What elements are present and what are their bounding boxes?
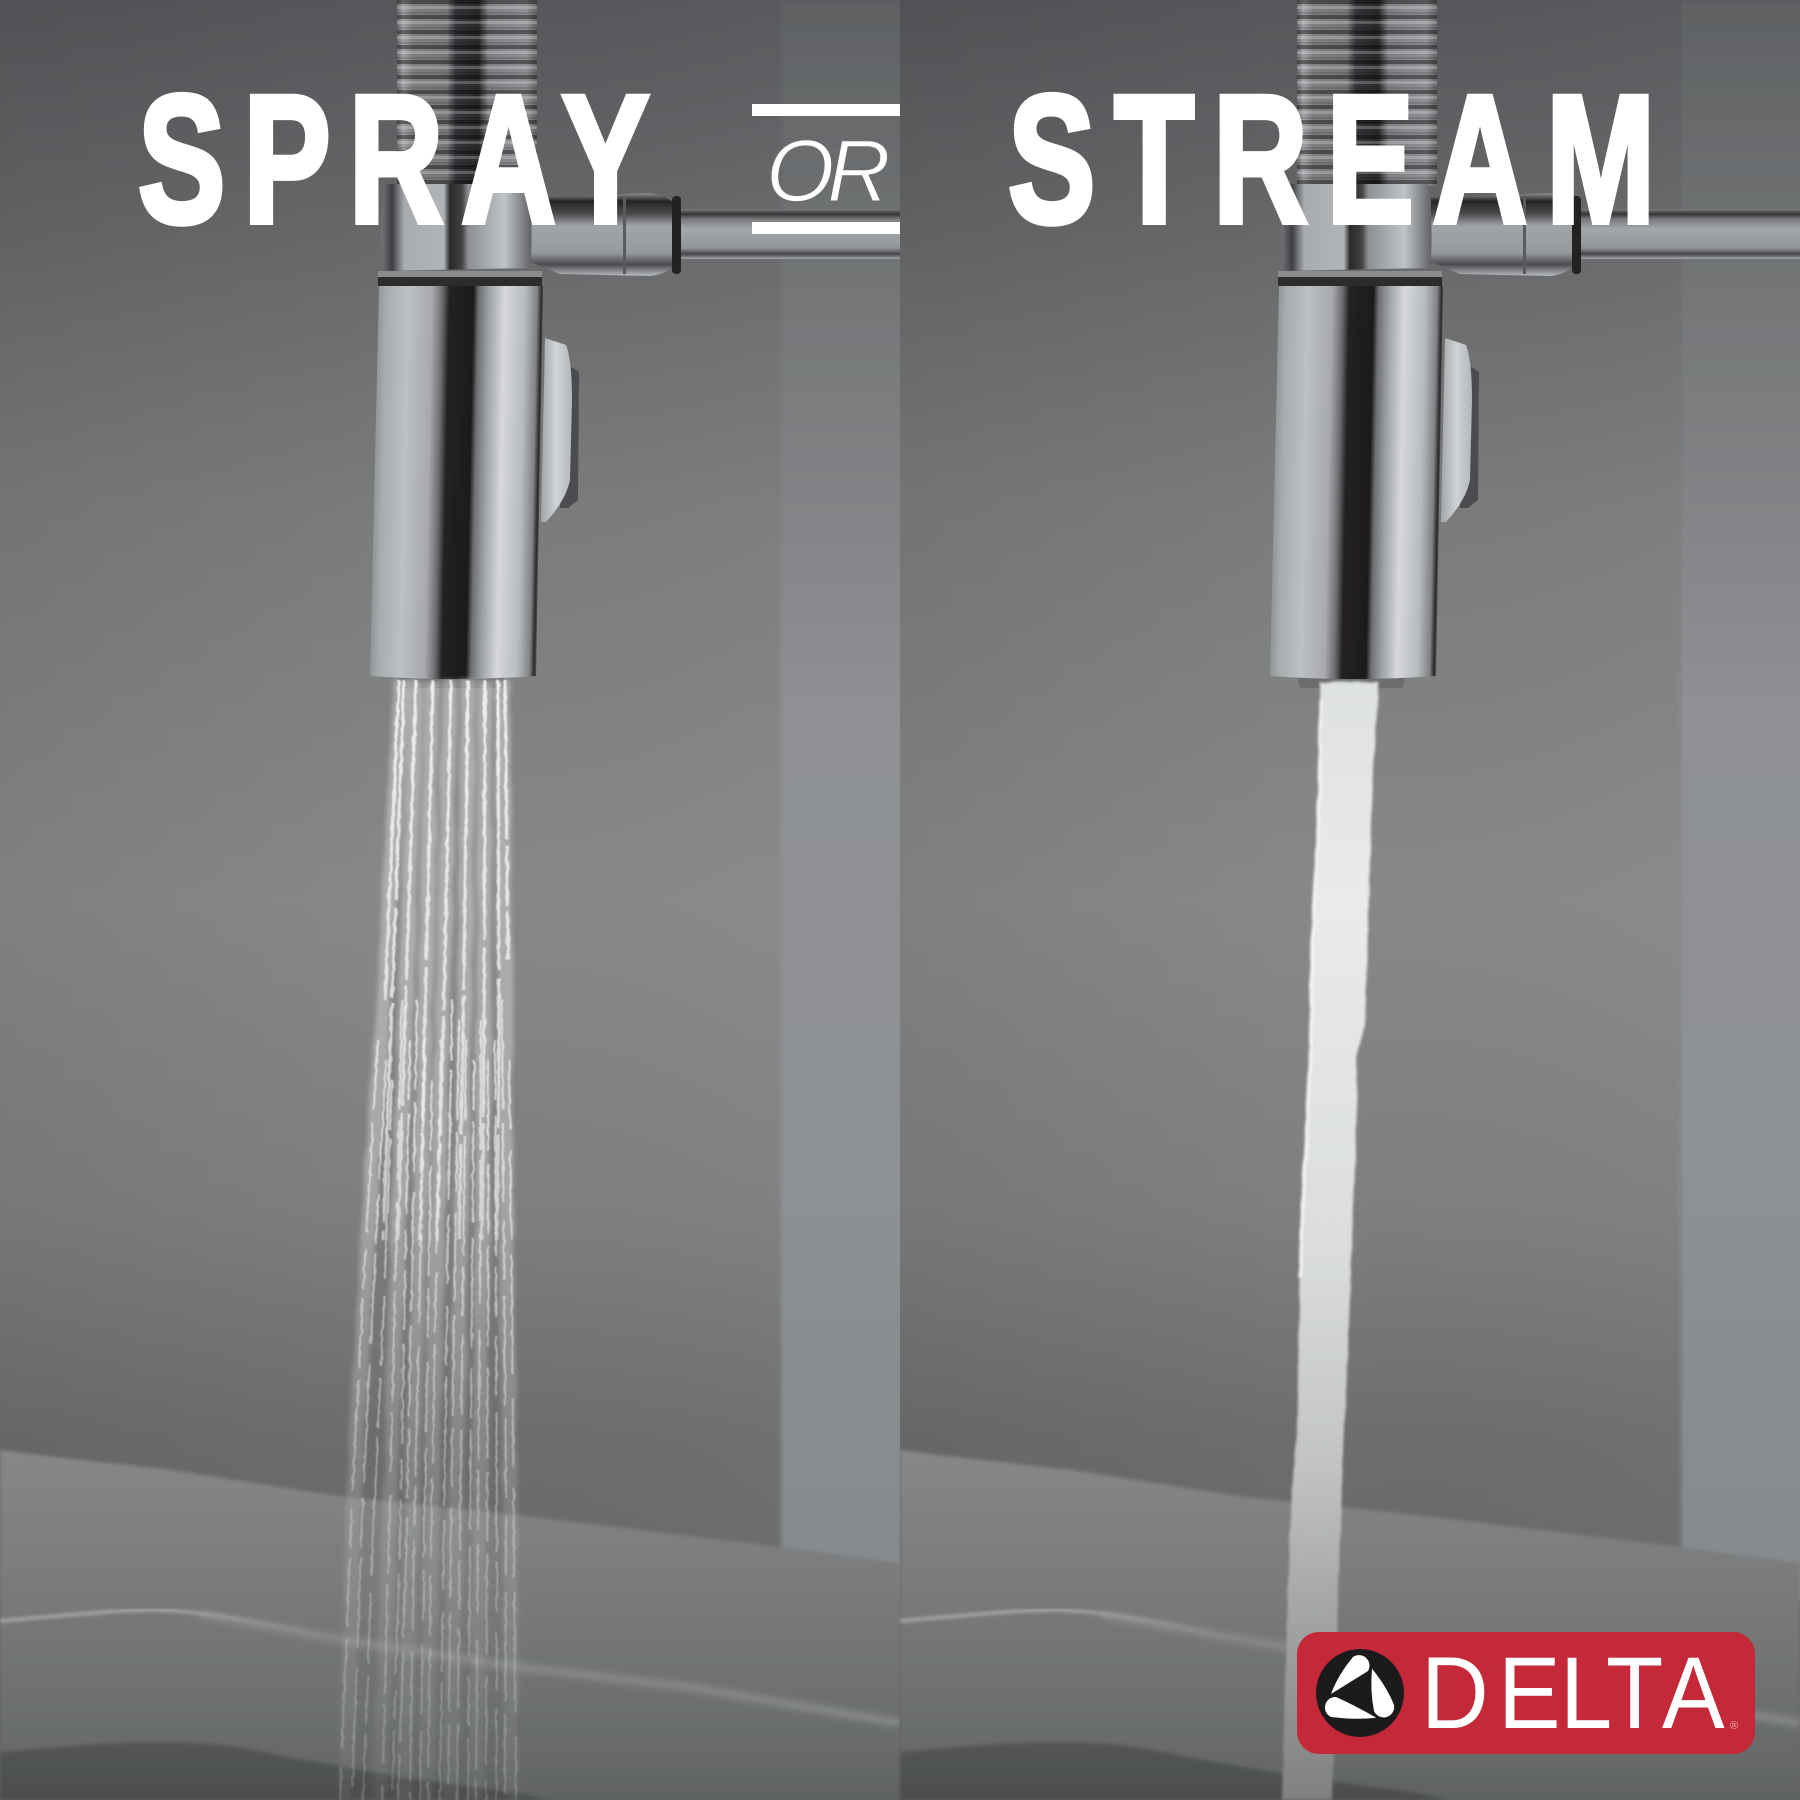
logo: Delta badge bbox=[1297, 1632, 1755, 1754]
title: STREAM: STREAM bbox=[1008, 57, 1655, 261]
stream water column bbox=[1282, 682, 1379, 1800]
stream faucet head bbox=[1270, 0, 1800, 688]
spray faucet head bbox=[370, 0, 900, 688]
word: OR with rules: OR bbox=[766, 121, 891, 220]
spray water strands bbox=[340, 680, 516, 1800]
icon: Delta triangle mark bbox=[1316, 1649, 1404, 1737]
panel: spray scene background bbox=[0, 0, 906, 1800]
word: OR with rules bbox=[752, 104, 900, 234]
title: SPRAY: SPRAY bbox=[138, 57, 649, 261]
registered mark: ® bbox=[1730, 1720, 1738, 1732]
panel: stream scene background bbox=[900, 0, 1800, 1800]
logo wordmark: DELTA bbox=[1421, 1635, 1725, 1750]
